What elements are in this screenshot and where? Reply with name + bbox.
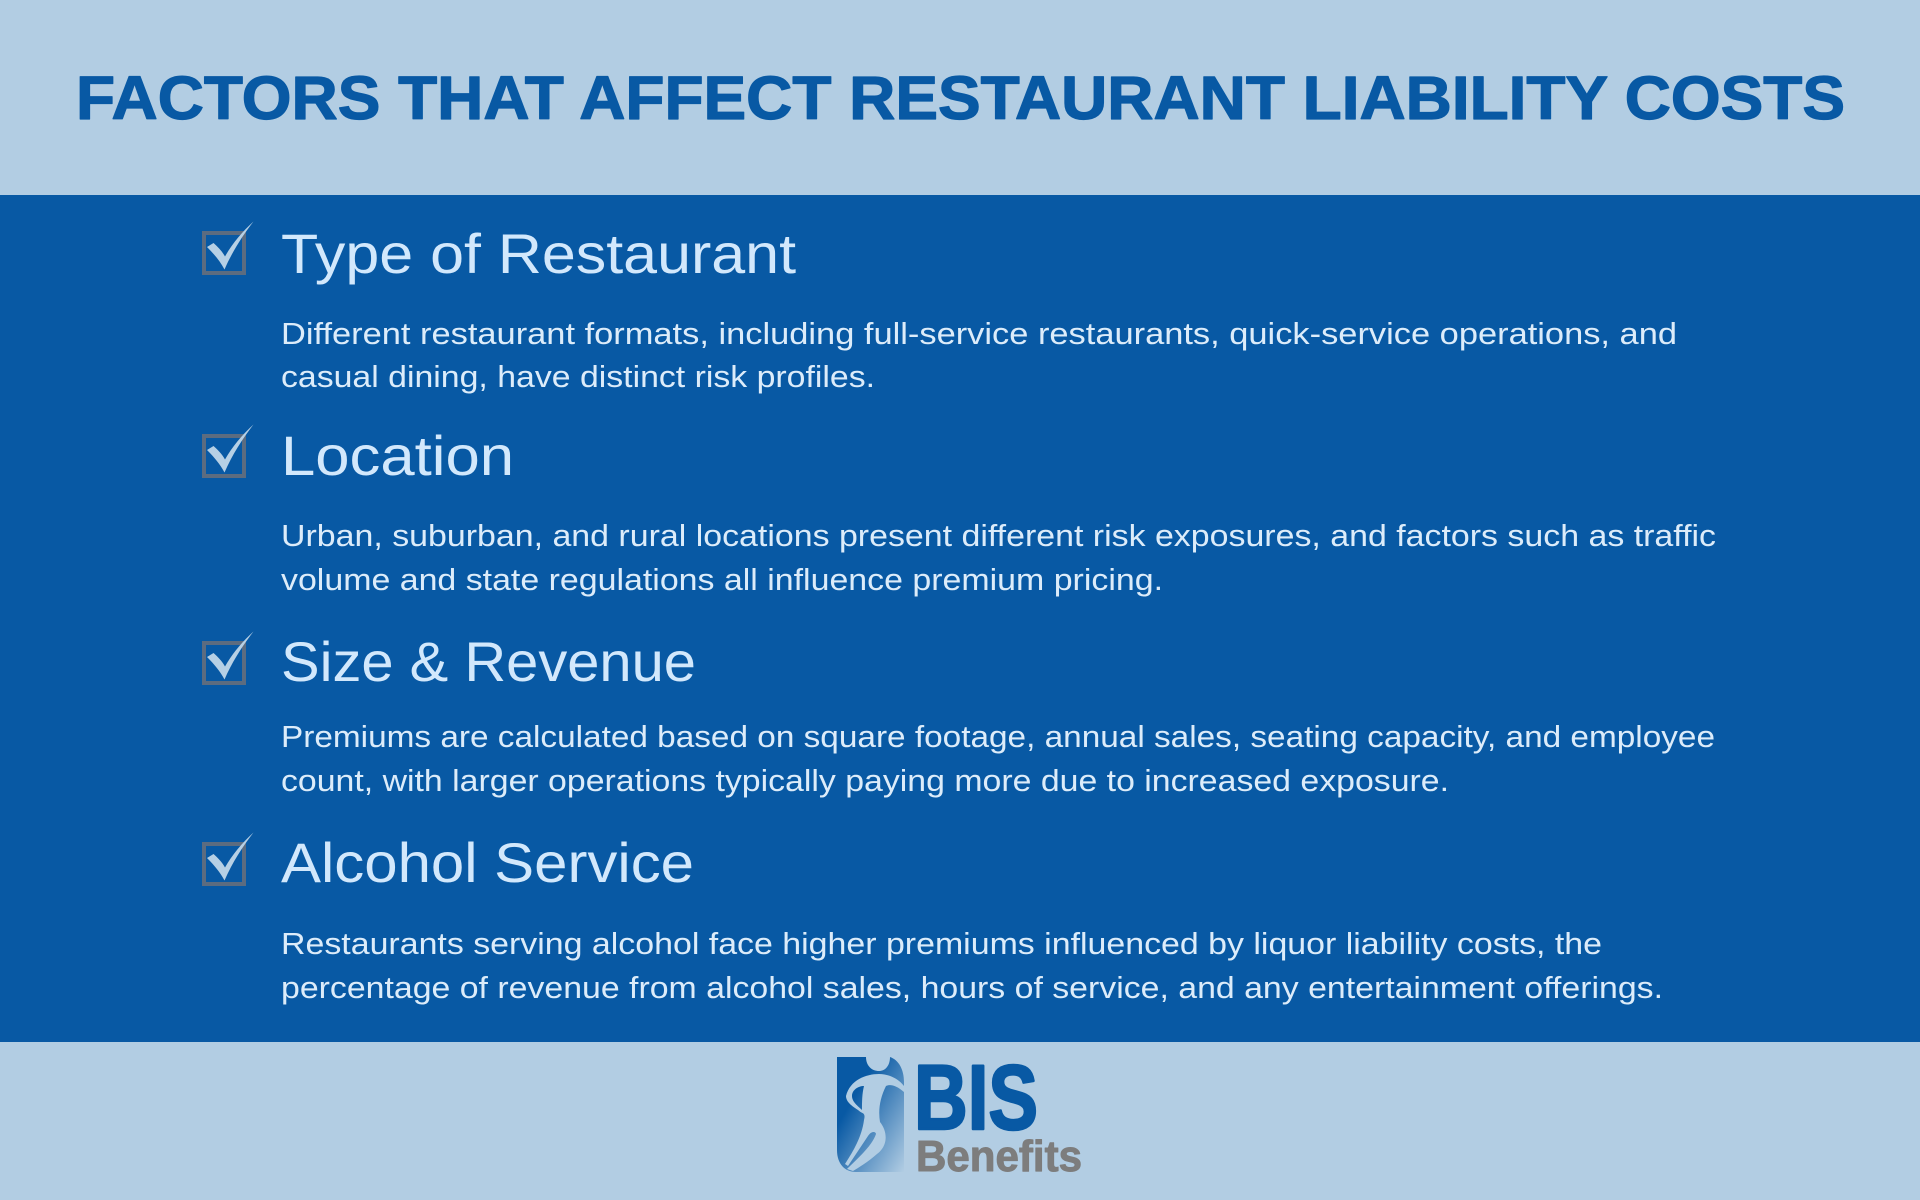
description: location xyxy=(281,518,1716,597)
icon: checkbox xyxy=(204,832,254,884)
description: size and revenue: Premiums are calculated based on square footage, annual sales, seating capacity, and employee xyxy=(281,719,1715,754)
heading: type of restaurant: Type of Restaurant xyxy=(281,222,796,285)
logo wordmark: BIS: BIS xyxy=(914,1047,1038,1149)
factor: type of restaurant xyxy=(204,222,1677,394)
icon: shield with runner xyxy=(837,1057,904,1172)
title: FACTORS THAT AFFECT RESTAURANT LIABILITY COSTS xyxy=(76,64,1845,132)
heading: location: Location xyxy=(281,424,514,487)
logo wordmark: Benefits: Benefits xyxy=(916,1132,1082,1181)
heading: alcohol service: Alcohol Service xyxy=(281,831,694,894)
description: alcohol service xyxy=(281,926,1663,1005)
description: size and revenue xyxy=(281,719,1715,798)
heading: size and revenue: Size & Revenue xyxy=(281,630,696,693)
description: alcohol service: percentage of revenue from alcohol sales, hours of service, and any entertainment offerings. xyxy=(281,970,1663,1005)
factor: location xyxy=(204,424,1716,597)
icon: checkbox xyxy=(204,424,254,476)
description: location: volume and state regulations all influence premium pricing. xyxy=(281,562,1163,597)
factor: alcohol service xyxy=(204,831,1663,1005)
description: type of restaurant: casual dining, have distinct risk profiles. xyxy=(281,359,875,394)
footer band xyxy=(0,1042,1920,1200)
logo: BIS Benefits xyxy=(837,1047,1082,1181)
description: type of restaurant xyxy=(281,316,1677,394)
panel background xyxy=(0,195,1920,1042)
factor: size and revenue xyxy=(204,630,1715,798)
description: alcohol service: Restaurants serving alcohol face higher premiums influenced by liquor liability costs, the xyxy=(281,926,1602,961)
description: size and revenue: count, with larger operations typically paying more due to increased exposure. xyxy=(281,763,1449,798)
description: location: Urban, suburban, and rural locations present different risk exposures, and factors such as traffic xyxy=(281,518,1716,553)
icon: checkbox xyxy=(204,632,254,683)
panel: factors list xyxy=(0,195,1920,1042)
description: type of restaurant: Different restaurant formats, including full-service restaurants, quick-service operations, and xyxy=(281,316,1677,351)
header band xyxy=(0,0,1920,195)
icon: checkbox xyxy=(204,222,254,273)
